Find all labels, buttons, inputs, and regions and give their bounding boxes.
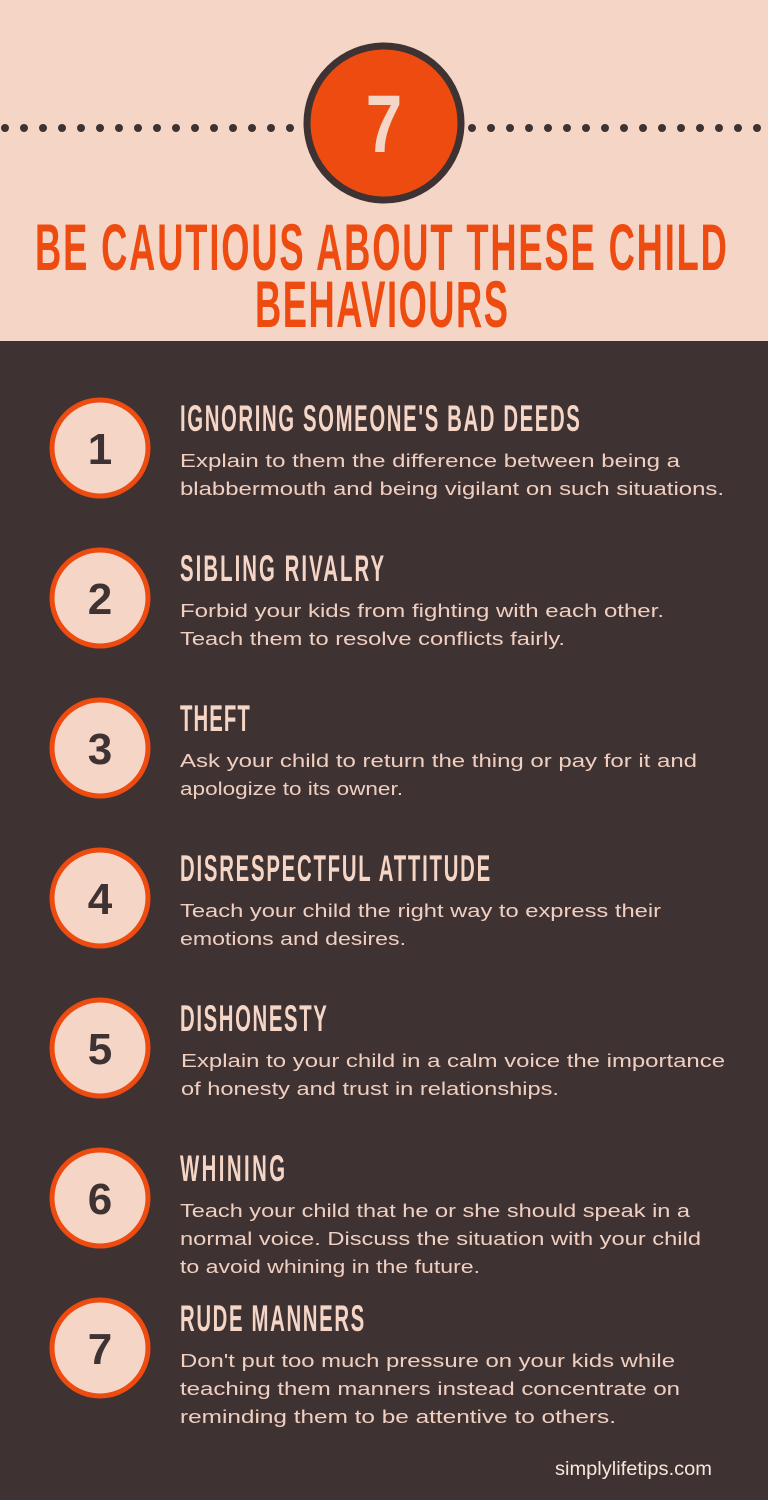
item 2: SIBLING RIVALRY	[180, 549, 384, 590]
item 5: 5	[88, 1025, 112, 1074]
item 6: normal voice. Discuss the situation with your child	[180, 1229, 701, 1249]
item 2: Forbid your kids from fighting with each other.	[180, 601, 664, 621]
dotted line	[1, 124, 761, 132]
item 5: of honesty and trust in relationships.	[181, 1079, 559, 1099]
item 6	[52, 1149, 701, 1277]
item 2: 2	[88, 575, 112, 624]
item 1	[52, 399, 724, 499]
title: BEHAVIOURS	[255, 269, 508, 342]
item 5: Explain to your child in a calm voice the importance	[181, 1051, 725, 1071]
item 6: 6	[88, 1175, 112, 1224]
header panel	[0, 0, 768, 342]
item 4: Teach your child the right way to express their	[180, 901, 661, 921]
item 7: RUDE MANNERS	[180, 1299, 364, 1340]
item 7: teaching them manners instead concentrate on	[180, 1379, 680, 1399]
item 4: DISRESPECTFUL ATTITUDE	[180, 849, 490, 890]
item 3: 3	[88, 725, 112, 774]
item 3: apologize to its owner.	[180, 779, 403, 799]
title: BE CAUTIOUS ABOUT THESE CHILD	[35, 212, 727, 285]
item 7: Don't put too much pressure on your kids while	[180, 1351, 675, 1371]
item 6: to avoid whining in the future.	[180, 1257, 480, 1277]
item 6: Teach your child that he or she should speak in a	[180, 1201, 691, 1221]
item 2	[52, 549, 664, 649]
badge: 7	[307, 46, 461, 200]
item 1: 1	[88, 425, 112, 474]
item 3	[52, 699, 697, 799]
item 7	[52, 1299, 680, 1427]
footer: source: simplylifetips.com	[555, 1459, 712, 1480]
item 4: 4	[88, 875, 113, 924]
item 1: Explain to them the difference between being a	[180, 451, 681, 471]
item 2: Teach them to resolve conflicts fairly.	[180, 629, 565, 649]
item 5: DISHONESTY	[180, 999, 327, 1040]
item 5	[52, 999, 725, 1099]
item 3: Ask your child to return the thing or pay for it and	[180, 751, 697, 771]
item 4: emotions and desires.	[180, 929, 406, 949]
item 7: 7	[88, 1325, 112, 1374]
item 1: IGNORING SOMEONE'S BAD DEEDS	[180, 399, 580, 440]
item 1: blabbermouth and being vigilant on such situations.	[180, 479, 724, 499]
item 4	[52, 849, 661, 949]
item 7: reminding them to be attentive to others.	[180, 1407, 616, 1427]
title	[35, 212, 727, 342]
item 6: WHINING	[180, 1149, 285, 1190]
badge: 7: 7	[366, 78, 402, 170]
item 3: THEFT	[180, 699, 250, 740]
